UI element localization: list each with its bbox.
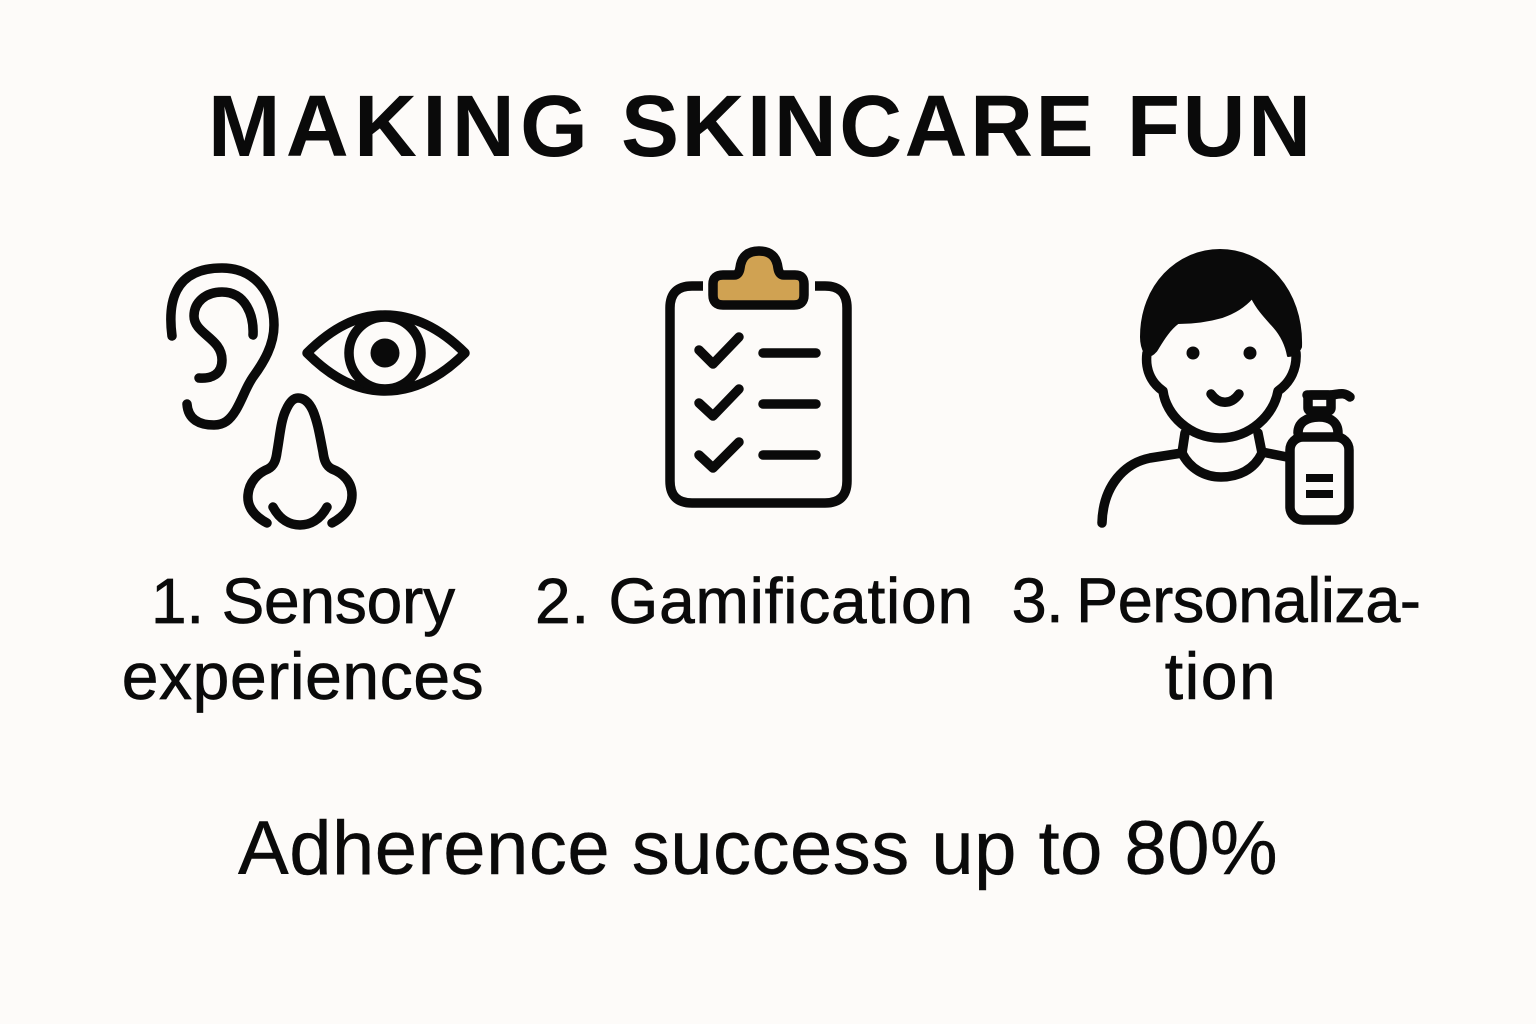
- label 3: 3. Personaliza-: [1012, 566, 1420, 636]
- label 1: [122, 565, 484, 713]
- label 3: tion: [1165, 639, 1277, 713]
- icon: nose: [248, 398, 352, 525]
- label 1: 1. Sensory: [151, 565, 455, 637]
- label 2: 2. Gamification: [535, 565, 974, 637]
- label 1: experiences: [122, 639, 484, 713]
- icon: person with bottle: [1102, 250, 1350, 523]
- icon: ear: [171, 268, 274, 425]
- icon: clipboard: [670, 251, 847, 503]
- title: MAKING SKINCARE FUN: [208, 78, 1314, 175]
- label 3: [1012, 566, 1420, 713]
- footer statement: Adherence success up to 80%: [238, 806, 1278, 891]
- icon: eye: [307, 315, 465, 391]
